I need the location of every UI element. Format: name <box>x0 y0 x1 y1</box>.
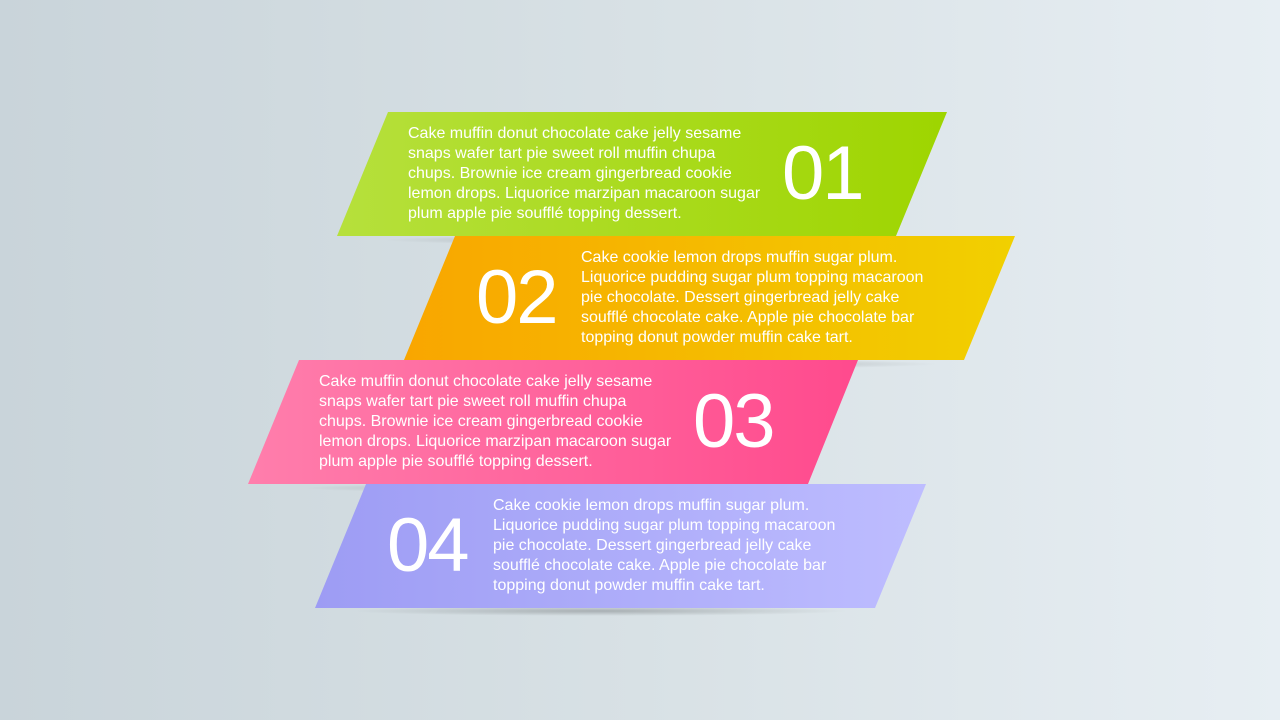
text block 01: lemon drops. Liquorice marzipan macaroon sugar <box>408 185 760 202</box>
panel: step 01 <box>337 112 947 236</box>
text block 04: Liquorice pudding sugar plum topping macaroon <box>493 517 835 534</box>
text block 03: chups. Brownie ice cream gingerbread cookie <box>319 413 643 430</box>
text block 02 <box>581 249 923 346</box>
text block 04: topping donut powder muffin cake tart. <box>493 577 765 594</box>
text block 01: plum apple pie soufflé topping dessert. <box>408 205 682 222</box>
panel: step 02 <box>404 236 1015 360</box>
text block 01: Cake muffin donut chocolate cake jelly sesame <box>408 125 741 142</box>
panel: step 04 <box>315 484 926 608</box>
number 03: 03 <box>693 379 774 464</box>
text block 01 <box>408 125 760 222</box>
number 01: 01 <box>782 131 863 216</box>
text block 01: chups. Brownie ice cream gingerbread cookie <box>408 165 732 182</box>
text block 03: Cake muffin donut chocolate cake jelly sesame <box>319 373 652 390</box>
panel: step 03 <box>248 360 858 484</box>
text block 04 <box>493 497 835 594</box>
text block 03: lemon drops. Liquorice marzipan macaroon sugar <box>319 433 671 450</box>
text block 03: plum apple pie soufflé topping dessert. <box>319 453 593 470</box>
text block 02: soufflé chocolate cake. Apple pie chocolate bar <box>581 309 914 326</box>
text block 04: pie chocolate. Dessert gingerbread jelly cake <box>493 537 811 554</box>
text block 02: topping donut powder muffin cake tart. <box>581 329 853 346</box>
text block 02: pie chocolate. Dessert gingerbread jelly cake <box>581 289 899 306</box>
text block 04: Cake cookie lemon drops muffin sugar plum. <box>493 497 809 514</box>
text block 03 <box>319 373 671 470</box>
text block 03: snaps wafer tart pie sweet roll muffin chupa <box>319 393 626 410</box>
number 02: 02 <box>476 255 557 340</box>
text block 01: snaps wafer tart pie sweet roll muffin chupa <box>408 145 715 162</box>
text block 02: Liquorice pudding sugar plum topping macaroon <box>581 269 923 286</box>
text block 02: Cake cookie lemon drops muffin sugar plum. <box>581 249 897 266</box>
number 04: 04 <box>387 503 468 588</box>
text block 04: soufflé chocolate cake. Apple pie chocolate bar <box>493 557 826 574</box>
